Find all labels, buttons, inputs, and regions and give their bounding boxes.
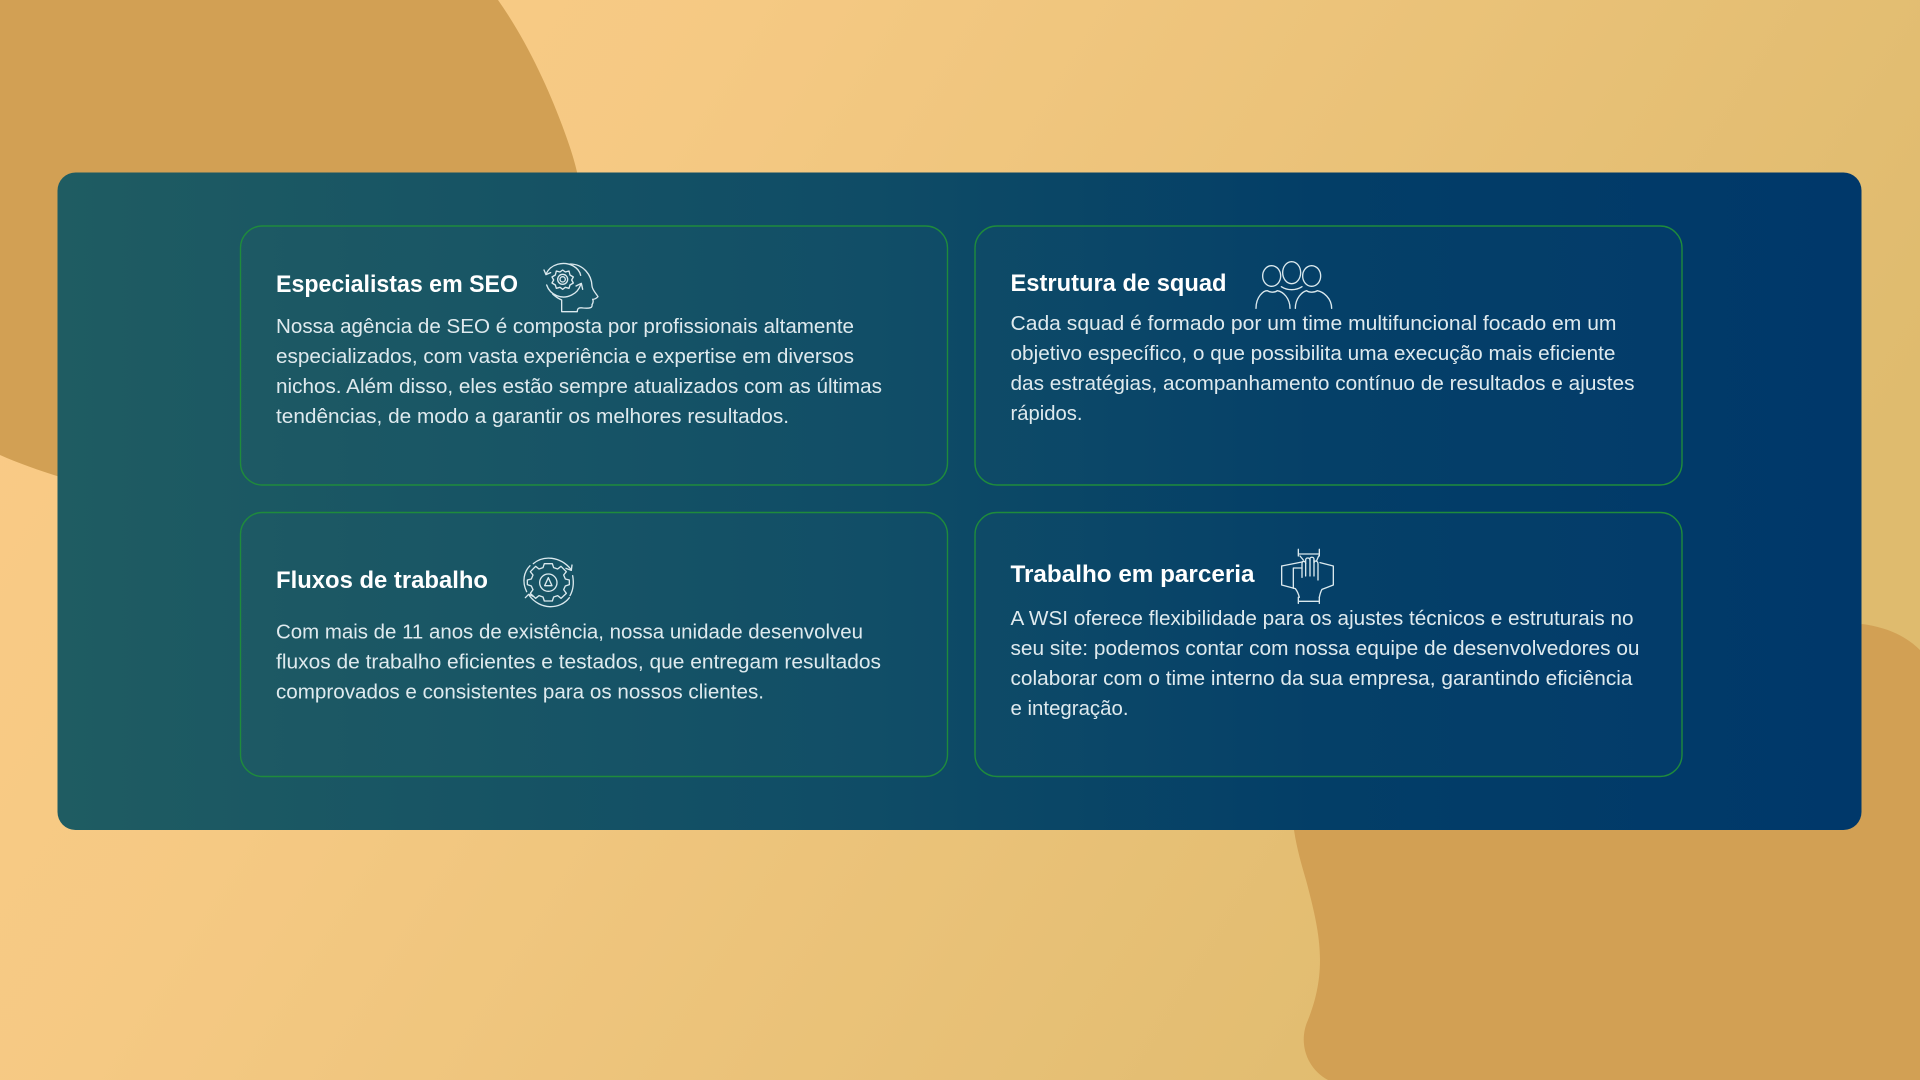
blob: top left (0, 0, 582, 500)
heading: Especialistas em SEO (276, 271, 518, 298)
body text (276, 315, 882, 428)
body text: e integração. (1010, 697, 1128, 720)
card: Estrutura de squad (975, 226, 1682, 485)
card: Trabalho em parceria (975, 512, 1682, 776)
blob: bottom right (1290, 624, 1920, 1080)
body text: Com mais de 11 anos de existência, nossa unidade desenvolveu (276, 620, 863, 644)
body text: objetivo específico, o que possibilita uma execução mais eficiente (1010, 342, 1616, 365)
body text: A WSI oferece flexibilidade para os ajustes técnicos e estruturais no (1010, 607, 1634, 630)
body text (1010, 607, 1640, 720)
body text: seu site: podemos contar com nossa equipe de desenvolvedores ou (1010, 637, 1640, 660)
icon: gear with arrows (524, 558, 573, 607)
body text: Nossa agência de SEO é composta por profissionais altamente (276, 315, 854, 338)
body text: tendências, de modo a garantir os melhores resultados. (276, 405, 789, 428)
body text: das estratégias, acompanhamento contínuo de resultados e ajustes (1010, 372, 1634, 395)
body text: colaborar com o time interno da sua empresa, garantindo eficiência (1010, 667, 1633, 690)
body text: rápidos. (1010, 402, 1082, 425)
icon: stacked hands (1282, 549, 1333, 603)
body text (1010, 312, 1634, 425)
body text: Cada squad é formado por um time multifuncional focado em um (1010, 312, 1616, 335)
card: Fluxos de trabalho (240, 512, 948, 776)
body text (276, 620, 881, 704)
card: Especialistas em SEO (240, 226, 948, 485)
body text: especializados, com vasta experiência e expertise em diversos (276, 345, 854, 368)
body text: nichos. Além disso, eles estão sempre atualizados com as últimas (276, 375, 882, 398)
main panel (58, 172, 1862, 830)
heading: Estrutura de squad (1010, 270, 1226, 297)
body text: comprovados e consistentes para os nossos clientes. (276, 680, 764, 704)
icon: head with gear (544, 263, 598, 312)
heading: Trabalho em parceria (1010, 561, 1255, 588)
heading: Fluxos de trabalho (276, 567, 488, 594)
body text: fluxos de trabalho eficientes e testados, que entregam resultados (276, 650, 881, 674)
icon: three people (1256, 262, 1332, 308)
